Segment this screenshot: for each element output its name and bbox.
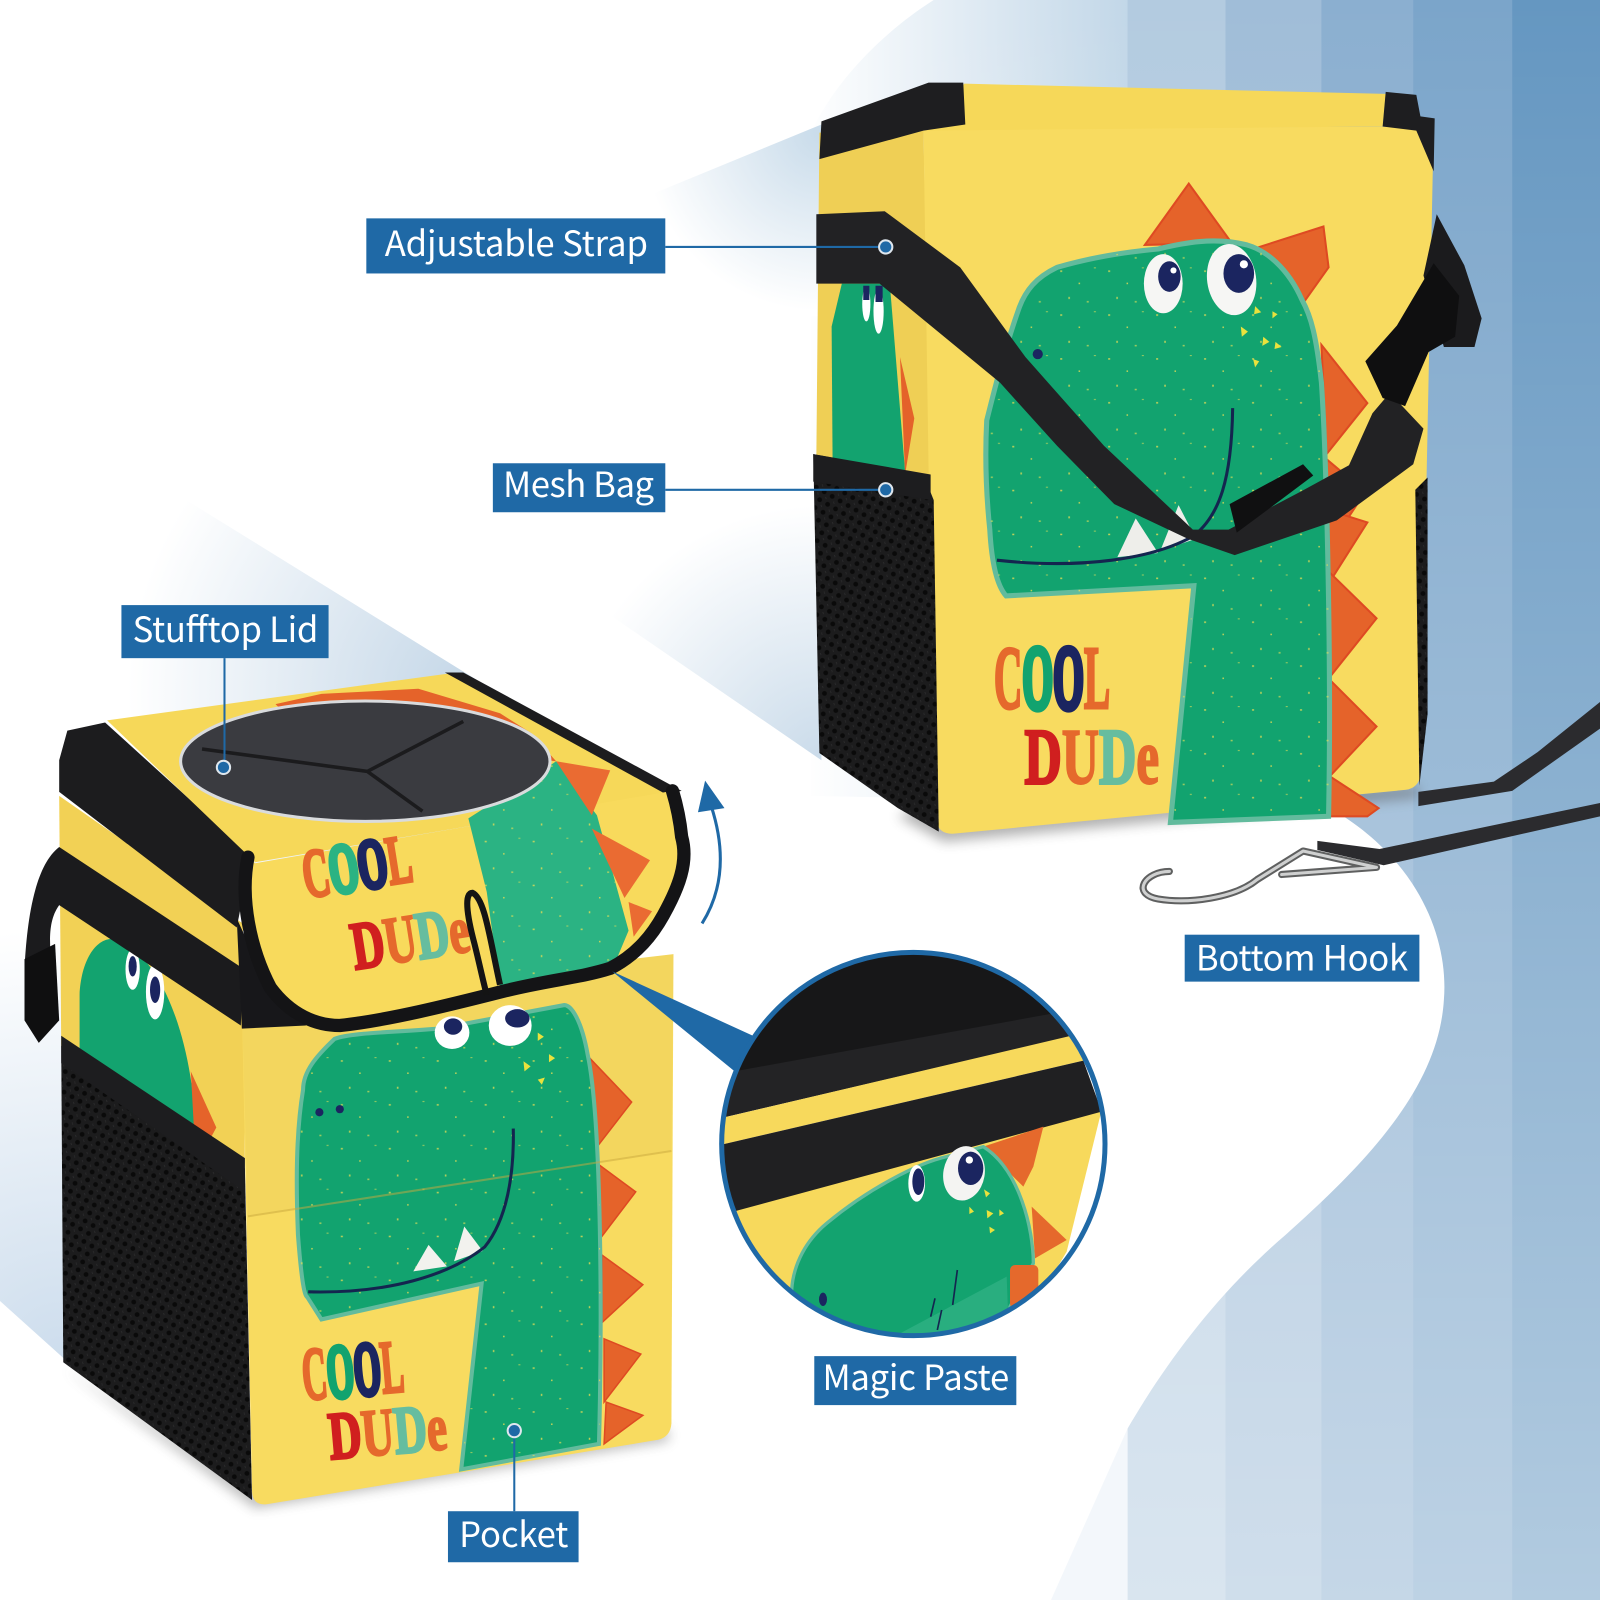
mesh side [61,1046,252,1500]
detail: ring [722,952,1105,1336]
detail: nostril and mouth [819,1270,957,1330]
mesh pocket: right edge [1415,478,1428,786]
eyes under lid [435,1005,532,1049]
dino speckles [297,1005,601,1469]
lid pull cord [467,893,500,995]
dino teeth [413,1227,483,1271]
detail: yellow strip [720,1036,1083,1145]
label: magic paste: Magic Paste [822,1350,1009,1400]
long strap [1418,702,1600,806]
detail: lower velcro [720,1061,1102,1212]
lid yellow top [107,673,678,862]
front panel [923,127,1434,834]
top black band [59,722,251,928]
dino freckles [523,1033,555,1085]
front upper shade [242,954,673,1216]
detail: spikes [983,1127,1067,1258]
detail: upper velcro [720,1013,1070,1118]
side dino [80,939,216,1165]
print: cool: COOL [298,1325,407,1417]
lid far binding [445,672,682,794]
pocket fold [248,1151,671,1216]
lid print: cool: COOL [297,820,417,914]
dino mouth [308,1129,513,1292]
detail: eyes [908,1146,985,1202]
dino spikes [590,1058,643,1444]
buckle [24,944,59,1043]
binding: right [1383,92,1435,171]
dino body [986,241,1329,822]
lid spikes on flap [556,761,652,937]
dino spikes [1145,184,1379,816]
dino body [297,1005,601,1469]
detail: yellow fabric [736,1112,1100,1288]
leader: stufftop lid [217,658,230,774]
stuff-top opening [181,701,550,821]
leader: adjustable strap [665,240,892,254]
buckle [1365,263,1459,406]
print: dude: DUDe [1024,714,1159,802]
detail: dino head [790,1144,1035,1333]
detail: liner [739,954,1051,1070]
leader: mesh bag [665,483,892,496]
left bag: product, lid view [24,672,684,1508]
binding: left [819,83,965,159]
callout wedge [612,971,755,1071]
dino speckles [986,241,1329,822]
upper strap [1423,214,1482,347]
lid print: dude: DUDe [346,892,474,984]
right bag: product, upright view [813,83,1600,901]
dino nostril [1033,349,1043,359]
print: cool: COOL [994,629,1110,728]
detail: orange patch [1010,1265,1038,1308]
side panel [816,131,931,480]
label: adjustable strap: Adjustable Strap [385,216,648,266]
detail: neck fold [902,1277,1008,1333]
label: pocket: Pocket [459,1507,568,1557]
mesh pocket binding [61,1036,245,1192]
strap with hook [1143,803,1600,901]
magnified detail: magic paste [720,950,1105,1363]
side strap [24,847,243,1026]
dino eyes [1144,241,1261,318]
side dino [832,284,914,474]
dino nostrils [315,1105,344,1116]
shadow under flap [237,918,306,1029]
arrow: lid opens [698,781,724,923]
label: mesh bag: Mesh Bag [503,457,655,507]
dino teeth [1117,505,1196,557]
front panel [242,954,673,1504]
mesh pocket: side [813,454,939,832]
label: bottom hook: Bottom Hook [1196,930,1408,980]
lid front flap [245,791,683,1026]
print: dude: DUDe [325,1389,450,1474]
ground shadow [63,1367,668,1508]
dino mouth [997,408,1233,564]
top flap [923,84,1386,131]
shoulder strap [816,211,1423,555]
label: stufftop lid: Stufftop Lid [133,602,318,652]
ground shadow [898,786,1418,842]
lid green band [468,761,629,988]
lid border [245,791,684,1026]
background: blue stripes [806,0,1600,1600]
background: light shards [0,124,1128,1600]
dino freckles [1241,306,1282,367]
detail: freckles [969,1189,1004,1233]
upper side panel [59,796,245,1168]
lid top spikes [276,689,556,761]
strap adjuster [1230,464,1313,533]
lid speckles [468,761,629,988]
leader: pocket [508,1424,521,1511]
